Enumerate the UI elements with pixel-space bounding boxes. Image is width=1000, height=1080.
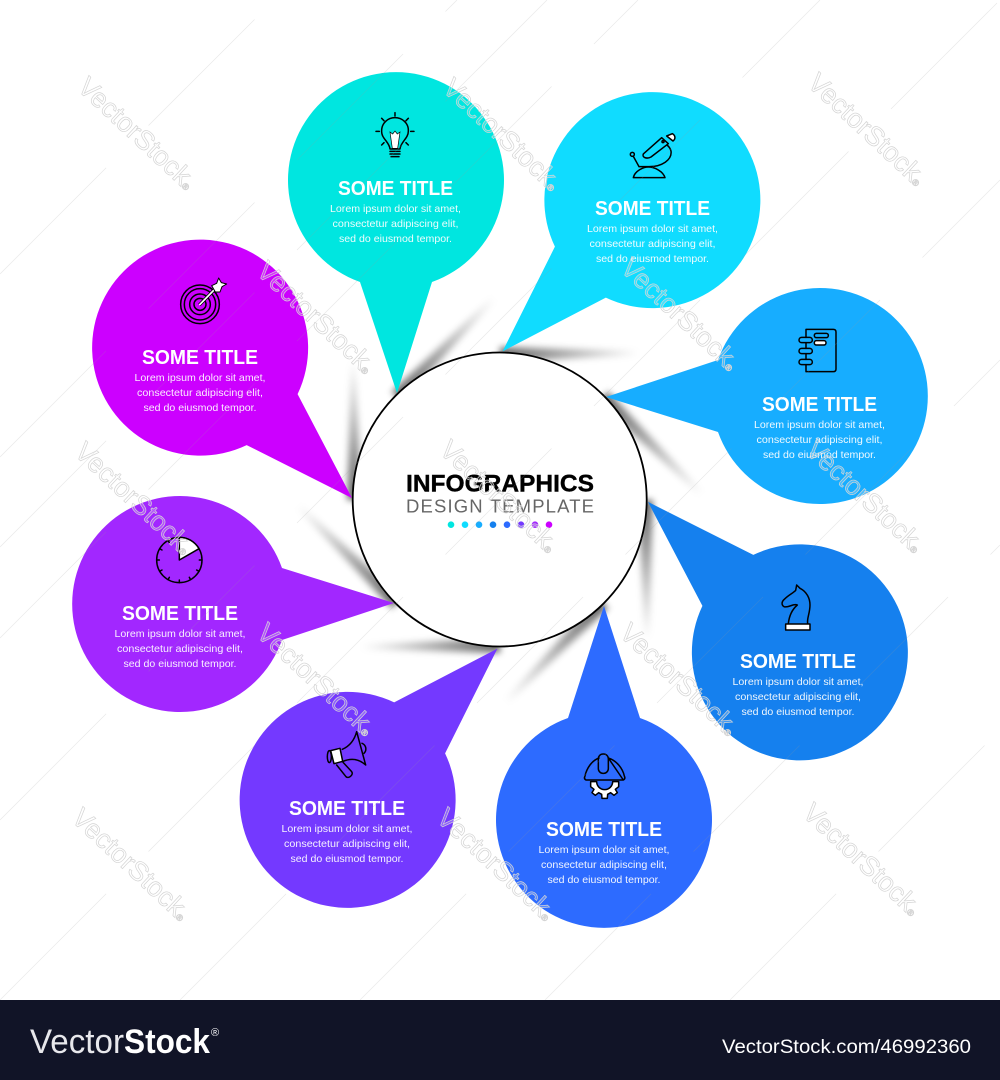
icon: megaphone (327, 732, 366, 777)
icon: target with arrow (181, 278, 227, 324)
icon: stopwatch dial (157, 537, 202, 583)
watermark grid: VectorStock® (797, 797, 927, 922)
title: SOME TITLE (289, 798, 405, 820)
bubble shape (72, 496, 394, 712)
body text: sed do eiusmod tempor. (339, 233, 452, 245)
body text: sed do eiusmod tempor. (290, 853, 404, 865)
bubble shape (426, 47, 805, 427)
body text: Lorem ipsum dolor sit amet, (330, 203, 461, 215)
watermark grid: VectorStock® (615, 252, 745, 377)
footer logo: ® (211, 1027, 219, 1039)
body text: sed do eiusmod tempor. (763, 449, 876, 461)
tail shadow 5 (360, 638, 500, 653)
bubble shape (195, 573, 574, 953)
body text: Lorem ipsum dolor sit amet, (587, 223, 718, 235)
panel: violet bubble (195, 573, 574, 953)
tail shadow 7 (347, 360, 362, 500)
bubble shape (606, 288, 928, 504)
body text (538, 844, 670, 886)
body text (732, 676, 864, 718)
watermark grid: VectorStock® (614, 617, 744, 742)
body text: sed do eiusmod tempor. (124, 658, 236, 670)
icon: helmet with gear (585, 754, 625, 798)
tail shadow 4 (499, 598, 608, 707)
body text (754, 419, 885, 461)
body text: consectetur adipiscing elit, (332, 218, 458, 230)
body text: consectetur adipiscing elit, (541, 859, 667, 871)
tail shadow 2 (598, 392, 707, 501)
watermark grid: VectorStock® (66, 802, 196, 927)
body text (330, 203, 461, 245)
body text: sed do eiusmod tempor. (548, 874, 660, 886)
body text: Lorem ipsum dolor sit amet, (282, 823, 412, 835)
body text: consectetur adipiscing elit, (284, 838, 410, 850)
panel: sky blue bubble (606, 288, 928, 504)
body text: sed do eiusmod tempor. (596, 253, 709, 265)
watermark grid: VectorStock® (431, 802, 561, 927)
bubble shape (572, 425, 953, 805)
body text (134, 372, 266, 414)
tail shadow 3 (638, 500, 653, 640)
icon: light bulb (376, 113, 414, 157)
title: SOME TITLE (142, 347, 258, 369)
icon: chess knight (782, 585, 810, 630)
bubble shape (288, 72, 504, 393)
title: SOME TITLE (762, 394, 877, 416)
title: SOME TITLE (595, 198, 710, 220)
icon: microscope (630, 134, 675, 178)
watermark grid (66, 67, 932, 927)
body text: consectetur adipiscing elit, (590, 238, 716, 250)
footer logo: Vector (30, 1023, 124, 1061)
body text: Lorem ipsum dolor sit amet, (114, 628, 246, 640)
footer bar (0, 1000, 1000, 1080)
title: SOME TITLE (122, 603, 238, 625)
body text: consectetur adipiscing elit, (137, 387, 263, 399)
watermark grid: VectorStock® (802, 67, 932, 192)
body text: Lorem ipsum dolor sit amet, (754, 419, 885, 431)
title: SOME TITLE (546, 819, 662, 841)
bubble shape (496, 606, 712, 928)
watermark grid: VectorStock® (800, 434, 930, 559)
watermark grid: VectorStock® (69, 436, 199, 561)
panel: purple bubble (72, 496, 394, 712)
footer logo: Stock (124, 1023, 210, 1061)
tail shadow 1 (500, 347, 640, 362)
panel: magenta bubble (47, 195, 428, 575)
colored dots (448, 521, 552, 528)
watermark grid: VectorStock® (434, 434, 564, 559)
body text: Lorem ipsum dolor sit amet, (732, 676, 864, 688)
footer logo (30, 1023, 219, 1061)
watermark grid: VectorStock® (251, 617, 381, 742)
footer image id: VectorStock.com/46992360 (722, 1036, 971, 1058)
icon: notebook (799, 329, 836, 372)
tail shadow 8 (392, 293, 501, 402)
center heading: INFOGRAPHICS (406, 470, 594, 498)
center subheading: DESIGN TEMPLATE (406, 496, 594, 517)
watermark grid: VectorStock® (251, 255, 381, 380)
body text (587, 223, 718, 265)
body text: consectetur adipiscing elit, (756, 434, 882, 446)
panel: teal bubble (288, 72, 504, 393)
watermark grid: VectorStock® (437, 72, 567, 197)
title: SOME TITLE (740, 651, 856, 673)
body text: Lorem ipsum dolor sit amet, (538, 844, 670, 856)
panel: blue bubble (572, 425, 953, 805)
body text (282, 823, 412, 865)
tail shadow 6 (293, 499, 402, 608)
watermark grid: VectorStock® (72, 71, 202, 196)
bubble shape (47, 195, 428, 575)
body text (114, 628, 246, 670)
body text: consectetur adipiscing elit, (735, 691, 861, 703)
central circle (353, 352, 647, 646)
body text: sed do eiusmod tempor. (742, 706, 854, 718)
title: SOME TITLE (338, 178, 453, 200)
panel: royal blue bubble (496, 606, 712, 928)
panel: cyan bubble (426, 47, 805, 427)
body text: Lorem ipsum dolor sit amet, (134, 372, 266, 384)
body text: consectetur adipiscing elit, (117, 643, 243, 655)
body text: sed do eiusmod tempor. (144, 402, 256, 414)
